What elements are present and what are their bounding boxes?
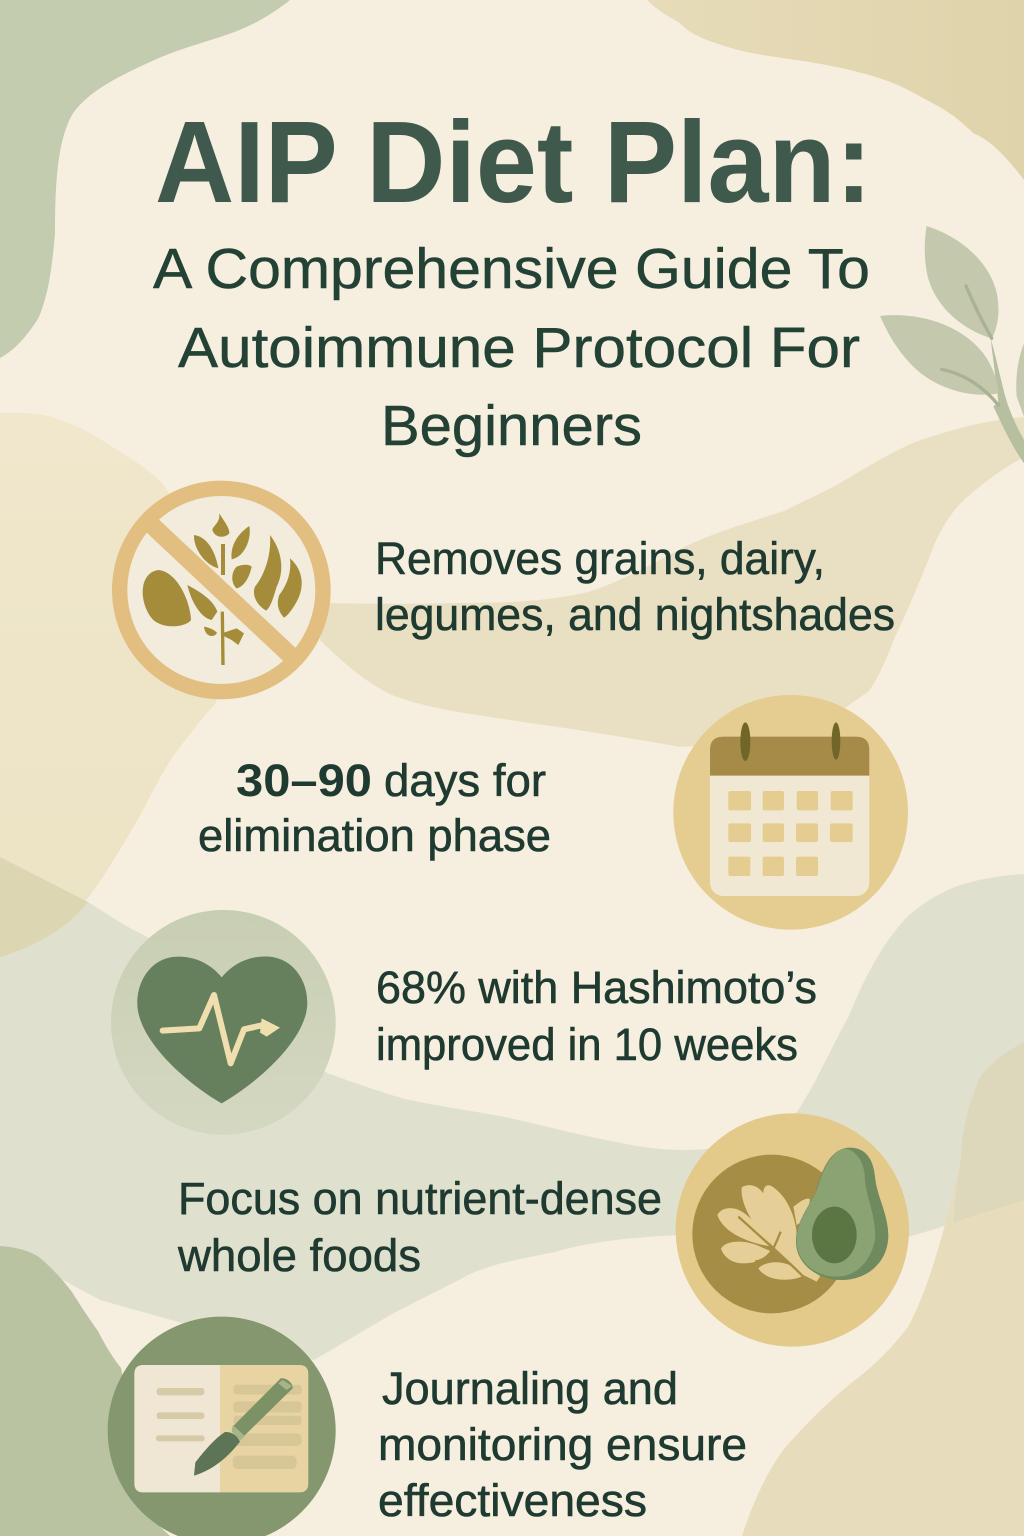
icon: prohibited foods <box>120 488 323 692</box>
text: removes: Removes grains, dairy, <box>375 533 825 584</box>
text: elimination phase: elimination phase <box>198 810 551 861</box>
subtitle: A Comprehensive Guide To <box>153 237 870 301</box>
subtitle <box>153 237 870 458</box>
icon: journal and pen <box>108 1317 336 1536</box>
text: Hashimoto's: improved in 10 weeks <box>376 1019 798 1070</box>
icon: calendar <box>673 695 908 930</box>
text: elimination phase: days for <box>384 755 546 806</box>
text: removes <box>375 533 895 640</box>
text: elimination phase <box>198 755 551 861</box>
text: journaling <box>378 1363 747 1526</box>
text: nutrient-dense: Focus on nutrient-dense <box>178 1173 662 1224</box>
text: elimination phase: 30–90 <box>236 755 372 806</box>
icon: heart with pulse <box>111 910 336 1135</box>
text: journaling: monitoring ensure <box>378 1419 747 1470</box>
text: nutrient-dense: whole foods <box>177 1230 421 1281</box>
text: Hashimoto's <box>376 962 817 1070</box>
title: AIP Diet Plan: <box>155 97 872 227</box>
subtitle: Beginners <box>381 394 642 458</box>
icon: plant sprig <box>880 226 1024 463</box>
icon: bowl and avocado <box>676 1113 909 1347</box>
text: removes: legumes, and nightshades <box>375 589 895 640</box>
subtitle: Autoimmune Protocol For <box>178 316 860 380</box>
text: nutrient-dense <box>177 1173 662 1281</box>
text: Hashimoto's: 68% with Hashimoto’s <box>376 962 817 1013</box>
text: journaling: effectiveness <box>378 1475 647 1526</box>
text: journaling: Journaling and <box>382 1363 678 1414</box>
